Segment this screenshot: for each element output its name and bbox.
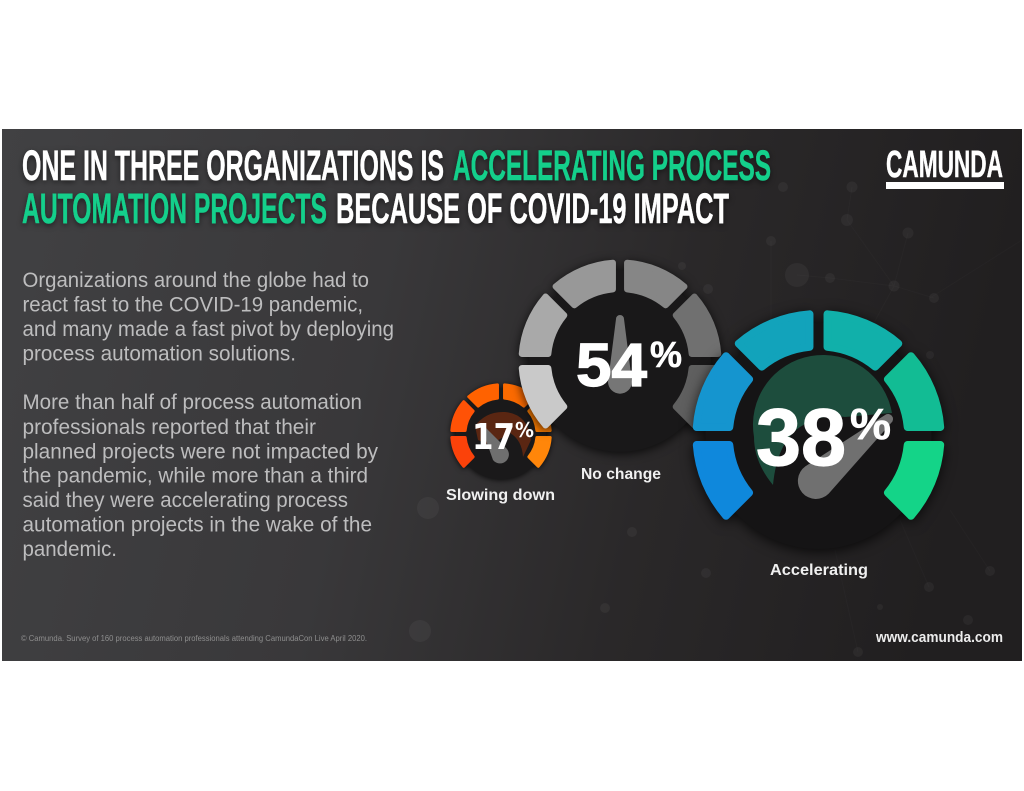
title: ACCELERATING PROCESS [453,142,771,190]
title: AUTOMATION PROJECTS [22,185,327,233]
gauge: accelerating 38%: 38 [756,393,846,483]
gauge: slowing down 17% [446,383,555,504]
gauge: no change 54% [517,258,723,483]
text block: intro paragraph: and many made a fast pivot by deploying [22,318,394,341]
text block: findings paragraph [22,391,378,561]
text block: findings paragraph: said they were accelerating process [22,489,348,512]
title: ONE IN THREE ORGANIZATIONS IS [22,142,444,190]
title [22,142,771,233]
gauge: no change 54%: % [650,334,682,375]
text block: intro paragraph: process automation solutions. [22,342,296,366]
text block: findings paragraph: pandemic. [22,538,117,561]
panel: dark background [2,129,1022,661]
gauge: accelerating 38%: Accelerating [770,562,868,579]
gauge: slowing down 17%: % [515,418,534,442]
gauge: accelerating 38% [691,308,946,579]
text block: findings paragraph: More than half of process automation [22,391,362,414]
text block: findings paragraph: the pandemic, while more than a third [22,465,368,488]
gauge: accelerating 38%: % [850,400,891,449]
gauge: slowing down 17%: 17 [472,417,515,458]
gauge: no change 54%: No change [581,466,661,483]
text block: findings paragraph: automation projects in the wake of the [22,514,372,537]
title: BECAUSE OF COVID-19 IMPACT [336,185,729,233]
website url: www.camunda.com [875,630,1003,646]
text block: intro paragraph: Organizations around the globe had to [22,269,369,292]
text block: findings paragraph: professionals reported that their [22,416,316,439]
text block: intro paragraph: react fast to the COVID-19 pandemic, [22,294,363,316]
gauge: no change 54%: 54 [576,331,647,399]
gauge: slowing down 17%: Slowing down [446,487,555,504]
footnote: survey source: © Camunda. Survey of 160 process automation professionals attending CamundaCon Live April 2020. [21,634,367,643]
text block: findings paragraph: planned projects were not impacted by [22,440,378,464]
text block: intro paragraph [22,269,394,366]
